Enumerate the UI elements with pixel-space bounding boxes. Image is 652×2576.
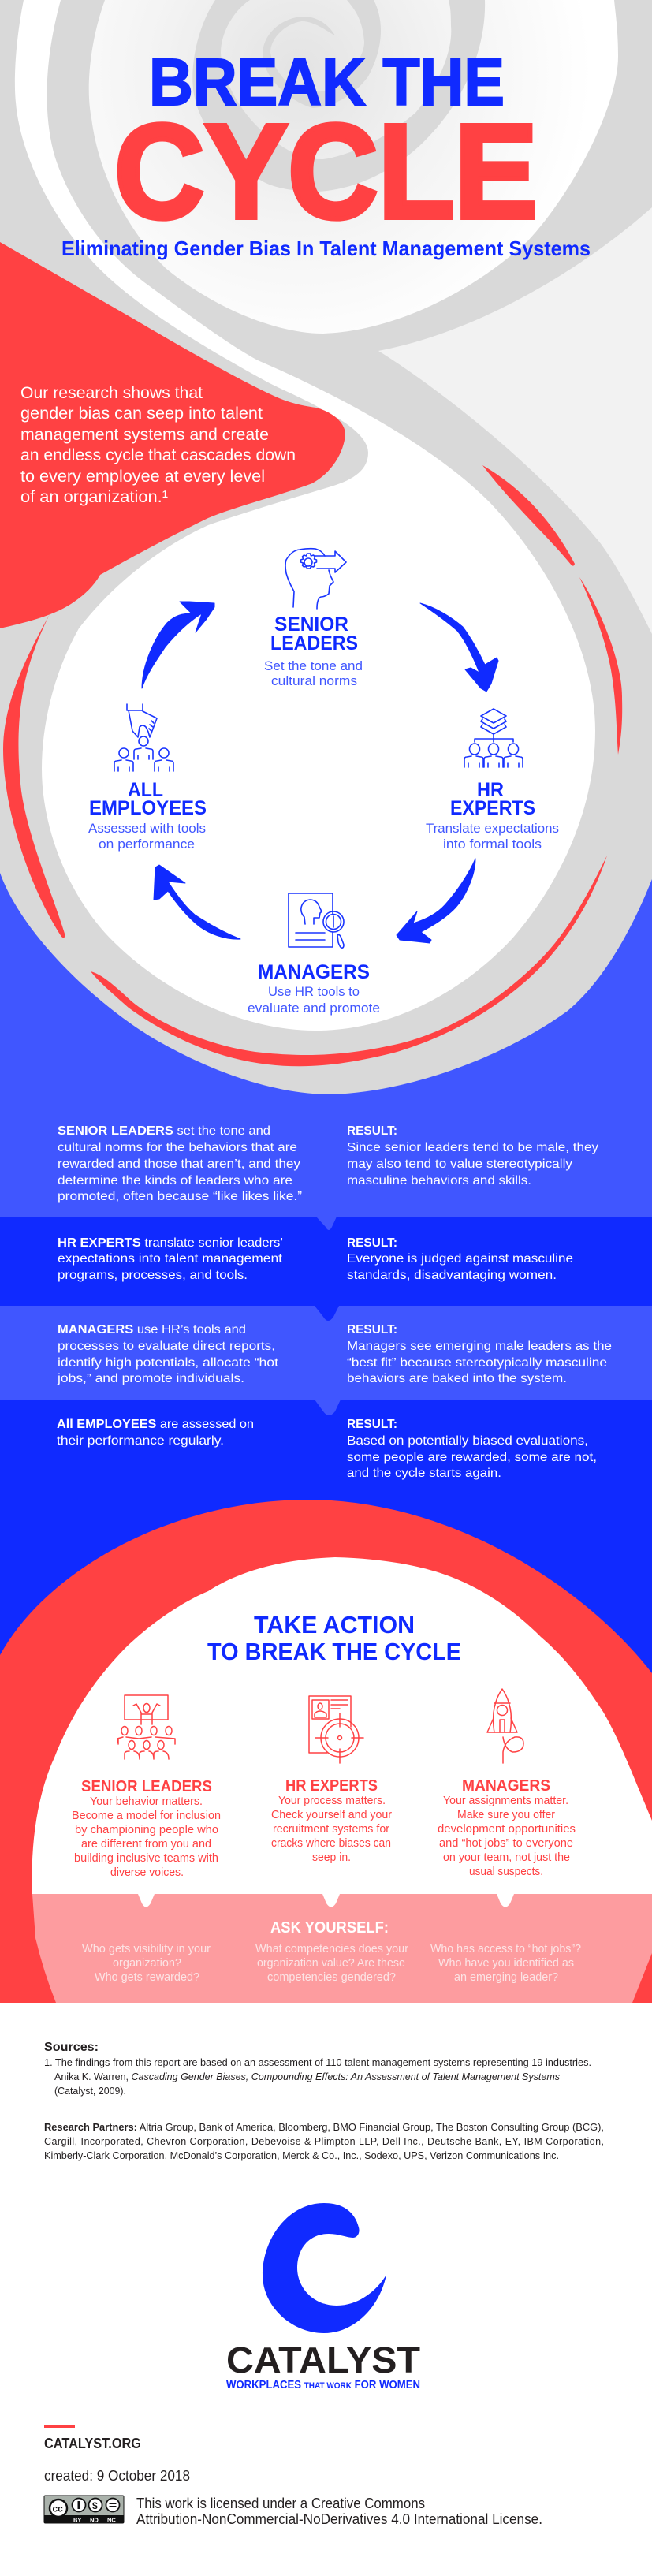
row: senior leaders: Since senior leaders tend to be male, they: [347, 1141, 598, 1154]
row: HR experts: programs, processes, and tools.: [58, 1269, 248, 1282]
arrow: senior leaders to HR experts: [420, 603, 498, 692]
row: all employees: [0, 1400, 652, 1715]
label: HR experts: Translate expectations: [426, 821, 559, 836]
arrow: HR experts to managers: [397, 859, 475, 943]
row: senior leaders: promoted, often because “like likes like.”: [58, 1190, 302, 1203]
questions: hr experts: competencies gendered?: [267, 1971, 396, 1984]
row: HR experts: [0, 1217, 652, 1306]
label: managers: MANAGERS: [258, 961, 370, 983]
website: CATALYST.ORG: [44, 2436, 141, 2451]
hr experts action text: HR EXPERTS: [285, 1776, 378, 1795]
icon: all employees hand picking a person: [114, 704, 173, 771]
row: all employees: RESULT:: [347, 1418, 397, 1431]
row: managers: MANAGERS use HR’s tools and: [58, 1323, 246, 1336]
questions: senior leaders: Who gets rewarded?: [95, 1971, 199, 1984]
label: HR experts: HR: [477, 779, 504, 801]
license text: [136, 2496, 542, 2527]
license text: Attribution-NonCommercial-NoDerivatives 4.0 International License.: [136, 2511, 542, 2527]
row: managers: Managers see emerging male leaders as the: [347, 1340, 612, 1353]
icon: rocket: [487, 1689, 523, 1763]
questions: managers: an emerging leader?: [454, 1971, 558, 1984]
arrow: managers to all employees: [154, 865, 240, 939]
senior leaders action text: Become a model for inclusion: [72, 1810, 221, 1822]
icon: HR experts layers and team: [464, 709, 523, 767]
icon: presenter and audience: [117, 1695, 175, 1759]
label: HR experts: EXPERTS: [450, 797, 535, 819]
sources: Sources:: [44, 2041, 99, 2054]
row: managers: jobs,” and promote individuals.: [57, 1372, 244, 1385]
red intro shape: [0, 242, 345, 628]
license text: This work is licensed under a Creative Commons: [136, 2496, 425, 2511]
senior leaders action text: [72, 1777, 221, 1879]
icon: brush C: [263, 2203, 386, 2333]
managers action text: on your team, not just the: [443, 1851, 570, 1864]
row: all employees: and the cycle starts again.: [347, 1467, 501, 1480]
heading: ask yourself: ASK YOURSELF:: [270, 1918, 389, 1937]
label: managers: [248, 961, 380, 1016]
row: managers: RESULT:: [347, 1323, 397, 1336]
questions: managers: [430, 1943, 581, 1984]
pink ask-yourself band: [32, 1894, 652, 2003]
row: all employees: Based on potentially biased evaluations,: [347, 1434, 588, 1448]
sources: Anika K. Warren, Cascading Gender Biases, Compounding Effects: An Assessment of Talent Management Systems: [54, 2071, 560, 2082]
intro text: gender bias can seep into talent: [20, 404, 263, 423]
senior leaders action text: diverse voices.: [110, 1866, 184, 1879]
icon: creative commons badge: NC: [107, 2517, 116, 2523]
row: managers: identify high potentials, allocate “hot: [58, 1356, 279, 1370]
panel: take action: [0, 1500, 652, 2003]
label: senior leaders: LEADERS: [270, 632, 358, 654]
hr experts action text: Check yourself and your: [271, 1809, 392, 1821]
senior leaders action text: SENIOR LEADERS: [81, 1777, 212, 1795]
label: senior leaders: SENIOR: [274, 613, 348, 636]
subtitle: Eliminating Gender Bias In Talent Management Systems: [61, 237, 591, 260]
row: senior leaders: RESULT:: [347, 1124, 397, 1138]
panel: roles and results: [0, 1124, 652, 1715]
row: senior leaders: [58, 1124, 598, 1203]
label: managers: Use HR tools to: [268, 984, 360, 999]
row: senior leaders: may also tend to value stereotypically: [347, 1158, 572, 1171]
research partners: Cargill, Incorporated, Chevron Corporation, Debevoise & Plimpton LLP, Dell Inc., Deutsche Bank, EY, IBM Corporation,: [44, 2136, 604, 2147]
icon: resume with target: [309, 1696, 363, 1763]
icon: senior leaders head with gear and arrow: [285, 549, 346, 609]
label: senior leaders: Set the tone and: [264, 658, 363, 673]
sources: (Catalyst, 2009).: [54, 2086, 126, 2097]
senior leaders action text: are different from you and: [81, 1838, 211, 1851]
label: senior leaders: cultural norms: [271, 673, 357, 688]
row: managers: [0, 1306, 652, 1400]
label: senior leaders: [264, 613, 363, 688]
senior leaders action text: Your behavior matters.: [90, 1795, 203, 1808]
tagline: WORKPLACES THAT WORK FOR WOMEN: [226, 2379, 420, 2391]
questions: hr experts: organization value? Are these: [257, 1957, 405, 1970]
label: all employees: Assessed with tools: [88, 821, 206, 836]
row: senior leaders: masculine behaviors and skills.: [347, 1174, 531, 1187]
white arch: [32, 1557, 652, 1894]
row: HR experts: Everyone is judged against masculine: [347, 1252, 573, 1266]
label: all employees: on performance: [99, 837, 195, 852]
hr experts action text: Your process matters.: [278, 1795, 386, 1807]
intro text: to every employee at every level: [20, 468, 265, 486]
icon: creative commons badge: $: [92, 2500, 98, 2511]
label: all employees: ALL: [128, 779, 163, 801]
row: senior leaders: cultural norms for the behaviors that are: [58, 1141, 297, 1154]
heading: take action: [207, 1611, 461, 1665]
panel: cycle diagram: [88, 549, 559, 1016]
hr experts action text: seep in.: [312, 1851, 351, 1864]
logo: Catalyst: [226, 2203, 420, 2391]
managers action text: MANAGERS: [462, 1776, 550, 1795]
accent line: [44, 2425, 75, 2428]
senior leaders action text: building inclusive teams with: [74, 1852, 218, 1865]
hr experts action text: recruitment systems for: [273, 1823, 389, 1836]
research partners: Kimberly-Clark Corporation, McDonald’s Corporation, Merck & Co., Inc., Sodexo, UPS, Verizon Communications Inc.: [44, 2150, 559, 2161]
row: all employees: All EMPLOYEES are assessed on: [57, 1418, 254, 1431]
heading: take action: TAKE ACTION: [254, 1611, 415, 1638]
icon: creative commons badge: ND: [90, 2517, 99, 2523]
questions: senior leaders: Who gets visibility in your: [82, 1943, 211, 1955]
row: managers: processes to evaluate direct reports,: [58, 1340, 275, 1353]
questions: hr experts: [255, 1943, 408, 1984]
hr experts action text: [271, 1776, 392, 1864]
managers action text: [438, 1776, 576, 1878]
icon: creative commons badge: cc: [52, 2503, 63, 2514]
managers action text: and “hot jobs” to everyone: [439, 1837, 573, 1850]
row: managers: behaviors are baked into the system.: [347, 1372, 567, 1385]
label: all employees: [88, 779, 207, 852]
managers action text: usual suspects.: [469, 1866, 543, 1878]
icon: creative commons badge: BY: [73, 2517, 81, 2523]
intro text: [20, 384, 296, 506]
research partners: Research Partners: Altria Group, Bank of America, Bloomberg, BMO Financial Group, The Boston Consulting Group (BCG),: [44, 2122, 604, 2133]
arrow: all employees to senior leaders: [142, 602, 214, 688]
white notches: [138, 1894, 514, 1907]
row: senior leaders: rewarded and those that aren’t, and they: [58, 1158, 300, 1171]
blue lower background: [0, 873, 652, 1217]
sources: 1. The findings from this report are based on an assessment of 110 talent management systems representing 19 industries.: [44, 2057, 591, 2068]
red arch: [0, 1500, 652, 2003]
heading: take action: TO BREAK THE CYCLE: [207, 1638, 461, 1665]
senior leaders action text: by championing people who: [75, 1824, 218, 1836]
icon: managers document with magnifier: [289, 893, 344, 948]
label: managers: evaluate and promote: [248, 1001, 380, 1016]
white footer background: [0, 2003, 652, 2576]
questions: managers: Who has access to “hot jobs”?: [430, 1943, 581, 1955]
managers action text: Your assignments matter.: [443, 1795, 568, 1807]
row: HR experts: standards, disadvantaging women.: [347, 1269, 557, 1282]
row: HR experts: RESULT:: [347, 1236, 397, 1250]
questions: managers: Who have you identified as: [438, 1957, 574, 1970]
row: HR experts: HR EXPERTS translate senior leaders’: [58, 1236, 283, 1250]
label: HR experts: [426, 779, 559, 852]
label: all employees: EMPLOYEES: [89, 797, 207, 819]
row: all employees: some people are rewarded, some are not,: [347, 1451, 597, 1464]
row: all employees: their performance regularly.: [57, 1434, 224, 1448]
managers action text: Make sure you offer: [457, 1809, 555, 1821]
icon: creative commons badge: [44, 2496, 124, 2523]
hr experts action text: cracks where biases can: [271, 1837, 391, 1850]
row: HR experts: expectations into talent management: [58, 1252, 283, 1266]
created date: created: 9 October 2018: [44, 2467, 190, 2484]
title: Break the Cycle: BREAK THE: [149, 45, 505, 119]
row: senior leaders: determine the kinds of leaders who are: [58, 1174, 292, 1187]
managers action text: development opportunities: [438, 1823, 576, 1836]
intro text: of an organization.¹: [20, 488, 168, 506]
sources: [44, 2041, 591, 2097]
row: senior leaders: SENIOR LEADERS set the tone and: [58, 1124, 270, 1138]
intro text: an endless cycle that cascades down: [20, 446, 296, 464]
wordmark: CATALYST: [226, 2339, 420, 2380]
questions: hr experts: What competencies does your: [255, 1943, 408, 1955]
intro text: management systems and create: [20, 426, 269, 444]
intro text: Our research shows that: [20, 384, 203, 402]
questions: senior leaders: [82, 1943, 211, 1984]
title: Break the Cycle: CYCLE: [114, 97, 538, 247]
label: HR experts: into formal tools: [443, 837, 542, 852]
background: spiral panel: [0, 0, 652, 1104]
questions: senior leaders: organization?: [113, 1957, 181, 1970]
red brush ring strokes: [3, 465, 622, 1066]
row: managers: “best fit” because stereotypically masculine: [347, 1356, 607, 1370]
research partners: [44, 2122, 604, 2161]
